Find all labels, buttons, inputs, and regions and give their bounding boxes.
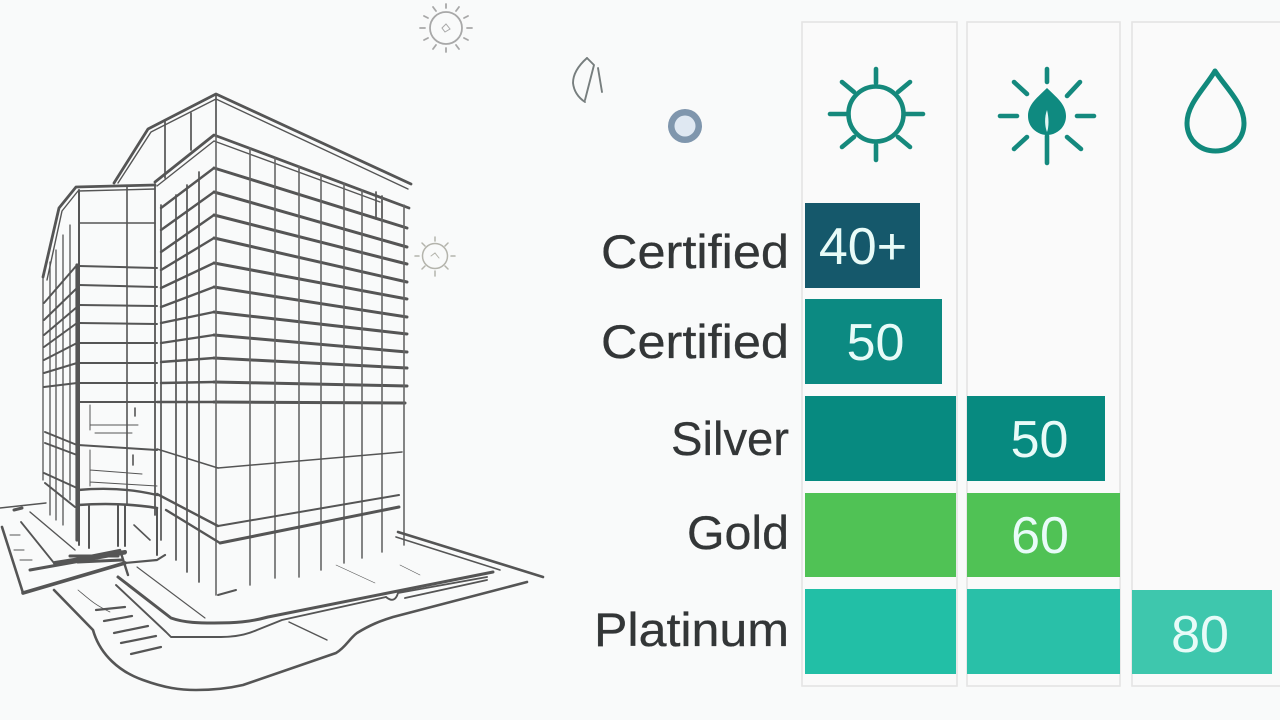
- label: Certified: Certified: [601, 225, 789, 278]
- column panel 1: [802, 22, 957, 686]
- left wing facade: [78, 187, 157, 555]
- bar: Platinum column 2: [967, 589, 1120, 674]
- bar: Platinum column 3: 80: [1171, 606, 1229, 664]
- far left side facade: [43, 225, 77, 540]
- row labels: [594, 225, 789, 656]
- illustration: building line drawing: [0, 94, 543, 690]
- icon: small leaf: [573, 58, 602, 102]
- upper roof outline: [43, 94, 411, 280]
- bar: Certified 40+: [805, 203, 920, 288]
- column panel 2: [967, 22, 1120, 686]
- bar: Silver column 1: [805, 396, 956, 481]
- bar: Gold column 2: [967, 493, 1120, 577]
- icon: small sun beside building: [415, 237, 455, 276]
- bar: Certified 40+: 40+: [819, 218, 907, 276]
- icon: small sun top: [420, 4, 472, 52]
- entrance and plaza: [0, 503, 165, 593]
- bar: Platinum column 1: [805, 589, 956, 674]
- bar: Platinum column 3: [1132, 590, 1272, 674]
- column panel 3: [1132, 22, 1280, 686]
- bar: Gold column 2: 60: [1011, 507, 1069, 565]
- label: Silver: Silver: [671, 412, 789, 465]
- crosswalk stripes: [96, 607, 161, 654]
- icon: blue dot: [668, 109, 702, 143]
- right facade mullions: [216, 135, 404, 595]
- corner facade: [155, 168, 220, 582]
- label: Platinum: Platinum: [594, 603, 789, 656]
- icon: sun with leaf: [1000, 69, 1094, 163]
- bar: Certified 50: [805, 299, 942, 384]
- bar: Certified 50: 50: [847, 314, 904, 372]
- icon: sun outline: [830, 69, 923, 160]
- icon: water drop: [1187, 71, 1244, 151]
- right facade base bands: [218, 452, 402, 595]
- right facade floor lines: [214, 168, 407, 403]
- label: Gold: Gold: [687, 506, 789, 559]
- bar: Silver column 2: [967, 396, 1105, 481]
- street curbs and paving: [54, 532, 543, 690]
- roof verticals: [165, 94, 382, 219]
- bar: Silver column 2: 50: [1011, 411, 1068, 469]
- bar: Gold column 1: [805, 493, 956, 577]
- label: Certified second: Certified: [601, 315, 789, 368]
